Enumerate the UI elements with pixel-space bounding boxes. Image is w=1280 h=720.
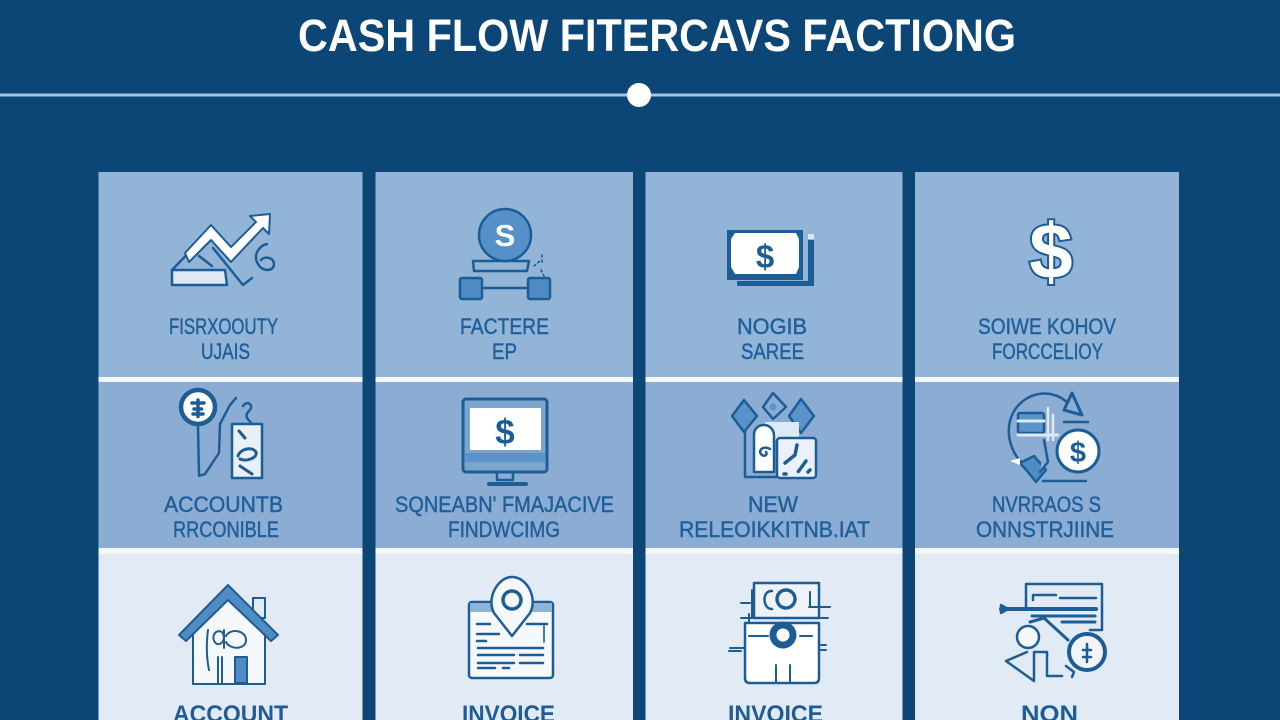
- label: [737, 314, 807, 364]
- label: [395, 492, 614, 542]
- panel: row 2 column 1: [98, 382, 362, 548]
- icon: sparkles and cards: [732, 393, 816, 478]
- icon: receivable tag: [181, 390, 262, 478]
- label: [169, 314, 278, 364]
- icon: banknote: [727, 230, 814, 286]
- label: RELEOIKKITNB.IAT: [679, 517, 870, 542]
- icon: invoice box with bill: [729, 583, 830, 683]
- icon: rising chart: [172, 214, 274, 285]
- panel: row 1 column 4: [915, 172, 1179, 377]
- icon: dollar sign: $: [1029, 207, 1073, 295]
- label: [679, 492, 870, 542]
- label: ONNSTRJIINE: [976, 517, 1114, 542]
- panel: row 3 column 1: [98, 554, 362, 720]
- panel: row 2 column 3: [646, 382, 902, 548]
- icon: coin on connected blocks: [460, 209, 550, 299]
- label: NVRRAOS S: [992, 492, 1101, 517]
- icon: circular payment cycle: [1009, 393, 1099, 482]
- label: SAREE: [741, 339, 804, 364]
- label: [976, 492, 1114, 542]
- icon: coin on connected blocks: S: [495, 218, 515, 253]
- label: [164, 492, 283, 542]
- label: [978, 314, 1116, 364]
- label: NOGIB: [737, 314, 807, 339]
- icon: computer monitor: $: [495, 413, 515, 452]
- panel: row 3 column 3: [646, 554, 902, 720]
- label: FISRXOOUTY: [169, 314, 278, 339]
- label: FORCCELIOY: [992, 339, 1103, 364]
- icon: house: [179, 585, 278, 684]
- icon: invoice with pin: [469, 577, 553, 678]
- panel: row 1 column 3: [646, 172, 902, 377]
- icon: computer monitor: [463, 399, 547, 484]
- row separators: [98, 377, 1179, 554]
- title: CASH FLOW FITERCAVS FACTIONG: [298, 10, 1016, 61]
- label: NEW: [748, 492, 798, 517]
- panel: row 2 column 2: [376, 382, 633, 548]
- label: UJAIS: [201, 339, 250, 364]
- label: RRCONIBLE: [173, 517, 279, 542]
- label: EP: [492, 339, 517, 364]
- label: SQNEABN' FMAJACIVE: [395, 492, 614, 517]
- label: [460, 314, 549, 364]
- icon: banknote: $: [756, 238, 774, 275]
- icon: person with document and coin: [1001, 584, 1105, 681]
- label: ACCOUNTB: [164, 492, 283, 517]
- label: FINDWCIMG: [448, 517, 560, 542]
- icon: circular payment cycle: $: [1070, 437, 1086, 469]
- panel: row 2 column 4: [915, 382, 1179, 548]
- panel: row 3 column 2: [376, 554, 633, 720]
- panel: row 3 column 4: [915, 554, 1179, 720]
- label: SOIWE KOHOV: [978, 314, 1116, 339]
- label: FACTERE: [460, 314, 549, 339]
- panel: row 1 column 1: [98, 172, 362, 377]
- panel: row 1 column 2: [376, 172, 633, 377]
- header divider with dot: [0, 83, 1280, 107]
